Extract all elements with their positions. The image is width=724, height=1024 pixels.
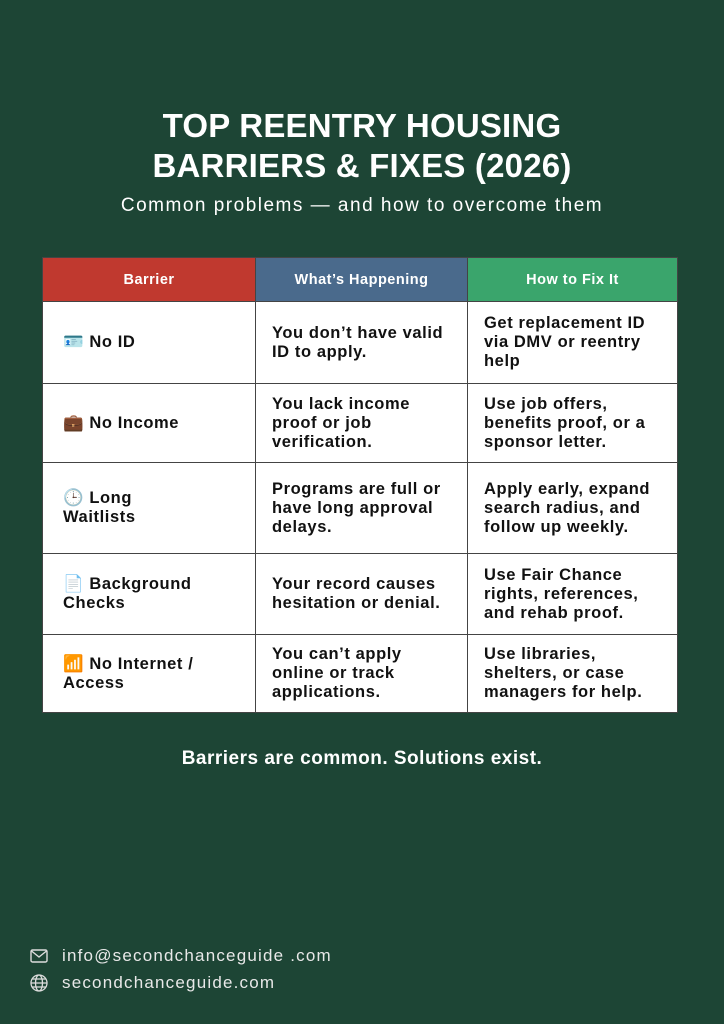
title: TOP REENTRY HOUSING (163, 107, 561, 144)
title (152, 107, 572, 184)
table: barriers and fixes: 🕒 Long (63, 489, 132, 507)
table: barriers and fixes: hesitation or denial. (272, 594, 440, 612)
table: barriers and fixes: Use job offers, (484, 394, 608, 412)
title: BARRIERS & FIXES (2026) (152, 147, 572, 184)
table: barriers and fixes: You can’t apply (272, 645, 402, 663)
table: barriers and fixes: Barrier (123, 272, 175, 288)
table: barriers and fixes: and rehab proof. (484, 604, 624, 622)
table: barriers and fixes: 🪪 No ID (63, 333, 135, 351)
table: barriers and fixes: delays. (272, 518, 332, 536)
table: barriers and fixes: shelters, or case (484, 664, 624, 682)
table: barriers and fixes: 📶 No Internet / (63, 654, 193, 672)
table: barriers and fixes: rights, references, (484, 584, 638, 602)
table: barriers and fixes: What’s Happening (295, 272, 428, 288)
table: barriers and fixes: search radius, and (484, 498, 641, 516)
table: barriers and fixes: managers for help. (484, 683, 642, 701)
table: barriers and fixes (42, 257, 678, 713)
table: barriers and fixes: Checks (63, 594, 125, 612)
table: barriers and fixes: benefits proof, or a (484, 414, 645, 432)
subtitle: Common problems — and how to overcome them (121, 195, 603, 216)
table: barriers and fixes: online or track (272, 664, 395, 682)
table: barriers and fixes: ID to apply. (272, 342, 367, 360)
table: barriers and fixes: Programs are full or (272, 480, 441, 498)
table: barriers and fixes: You don’t have valid (272, 324, 443, 342)
table: barriers and fixes: applications. (272, 683, 381, 701)
table: barriers and fixes: Use Fair Chance (484, 566, 622, 584)
table: barriers and fixes: have long approval (272, 498, 433, 516)
table: barriers and fixes: You lack income (272, 394, 410, 412)
table: barriers and fixes: Use libraries, (484, 645, 596, 663)
table: barriers and fixes: Get replacement ID (484, 314, 645, 332)
table: barriers and fixes: Waitlists (63, 508, 136, 526)
table: barriers and fixes: proof or job (272, 414, 372, 432)
table: barriers and fixes: 📄 Background (63, 575, 192, 593)
contact: website: secondchanceguide.com (62, 973, 275, 992)
contact: email: info@secondchanceguide .com (62, 946, 332, 965)
icon: envelope (30, 949, 48, 963)
table: barriers and fixes: verification. (272, 432, 372, 450)
table: barriers and fixes: help (484, 352, 520, 370)
table: barriers and fixes: How to Fix It (526, 272, 619, 288)
table: barriers and fixes: sponsor letter. (484, 432, 607, 450)
table: barriers and fixes: Access (63, 674, 124, 692)
table: barriers and fixes: via DMV or reentry (484, 333, 641, 351)
table: barriers and fixes: Your record causes (272, 575, 436, 593)
icon: globe (30, 974, 48, 992)
table: barriers and fixes: 💼 No Income (63, 414, 179, 432)
table: barriers and fixes: follow up weekly. (484, 518, 629, 536)
tagline: Barriers are common. Solutions exist. (182, 748, 542, 769)
table: barriers and fixes: Apply early, expand (484, 480, 650, 498)
